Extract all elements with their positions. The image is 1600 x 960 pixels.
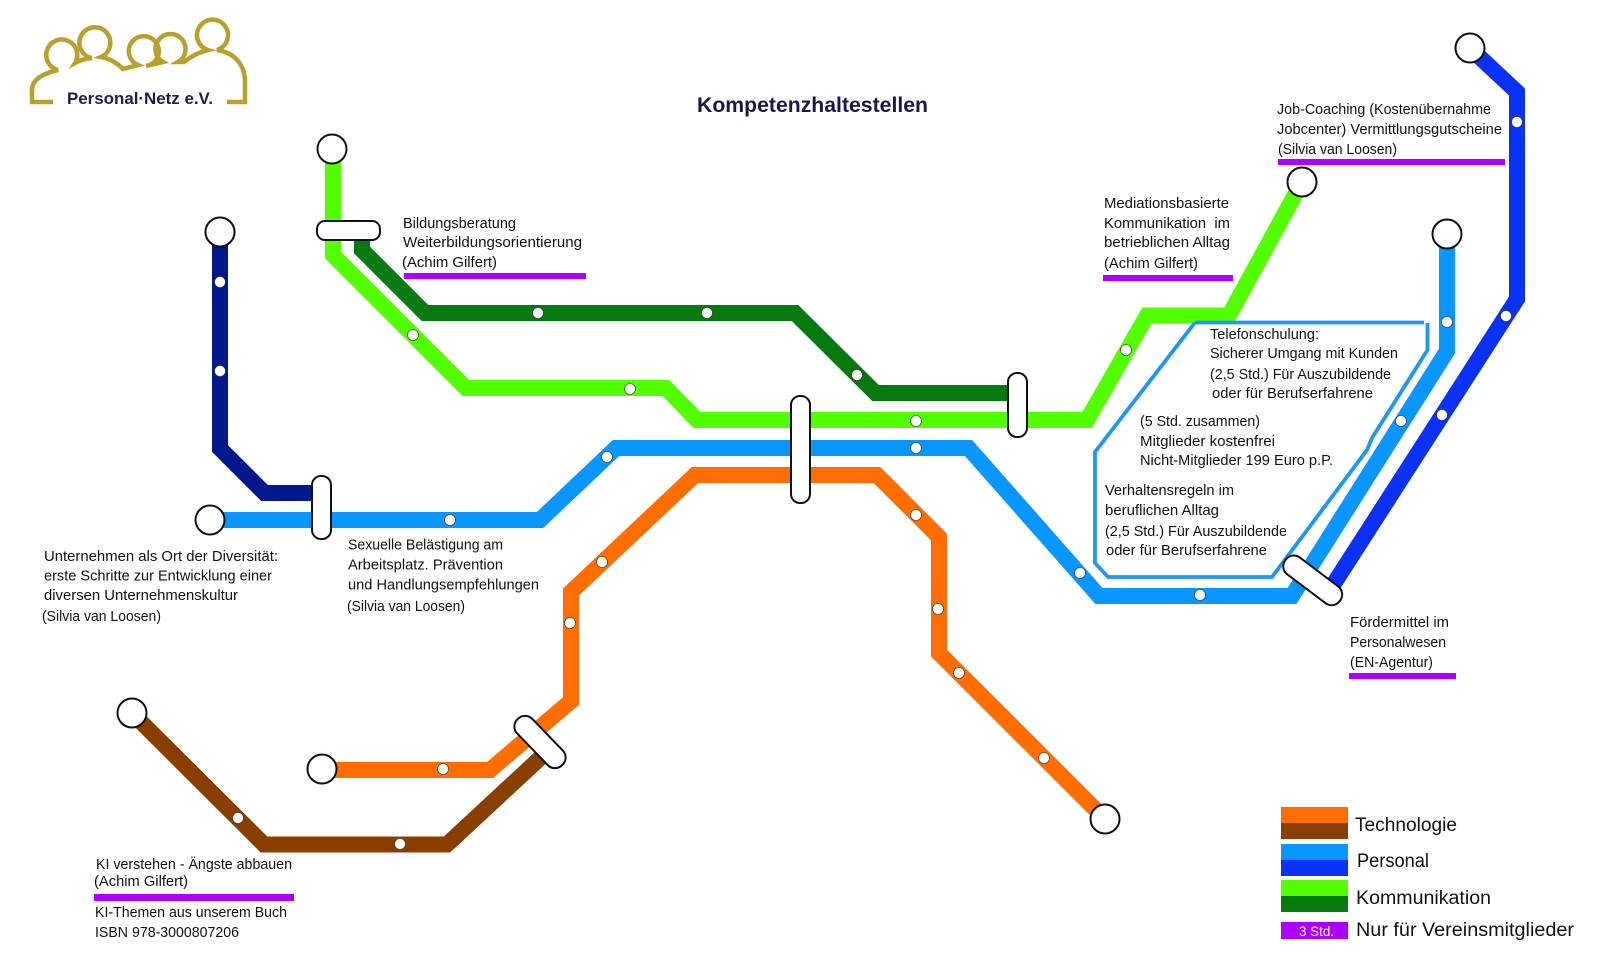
- label: KI verstehen: KI verstehen - Ängste abbauen: [96, 856, 292, 873]
- label: Mediationsbasierte Kommunikation: betrieblichen Alltag: [1104, 234, 1230, 251]
- interchange: green lines: [317, 221, 380, 240]
- legend: Kommunikation label: Kommunikation: [1356, 888, 1491, 909]
- stop: [852, 370, 862, 380]
- stop: [532, 308, 544, 318]
- label: Unternehmen als Ort der Diversität: Unternehmen als Ort der Diversität:: [44, 548, 278, 565]
- member bar: [1103, 275, 1233, 281]
- label: Preise: (5 Std. zusammen): [1140, 413, 1260, 430]
- stop: [564, 618, 576, 628]
- legend: [1281, 807, 1575, 941]
- stop: [408, 330, 418, 340]
- line: lime (Kommunikation): [333, 149, 1302, 426]
- label: KI verstehen: [94, 856, 294, 941]
- interchange: light blue and blue: [1279, 552, 1346, 609]
- line: dark green (Kommunikation): [362, 235, 1018, 393]
- member bar: [1349, 673, 1456, 679]
- label: Job-Coaching: Jobcenter) Vermittlungsgutscheine: [1277, 121, 1502, 138]
- label: Telefonschulung: Telefonschulung:: [1210, 326, 1319, 343]
- line: brown (Technologie): [132, 713, 551, 850]
- stop: [232, 812, 244, 824]
- stop: [1038, 752, 1050, 764]
- legend: Personal label: Personal: [1357, 851, 1429, 872]
- member bar: [404, 273, 586, 279]
- line: light blue (Personal): [210, 234, 1452, 600]
- legend: member swatch: [1281, 922, 1348, 939]
- label: Unternehmen als Ort der Diversität: (Silvia van Loosen): [42, 608, 161, 625]
- label: KI verstehen: KI-Themen aus unserem Buch: [95, 904, 287, 921]
- logo outline: group of people: [32, 20, 245, 102]
- stop: [1442, 316, 1452, 328]
- label: Preise: Nicht-Mitglieder 199 Euro p.P.: [1140, 452, 1333, 469]
- terminal stations: [118, 34, 1484, 834]
- label: Unternehmen als Ort der Diversität: diversen Unternehmenskultur: [44, 587, 238, 604]
- legend: Kommunikation swatch: [1281, 880, 1348, 912]
- label: Preise: [1140, 413, 1333, 469]
- label: Preise: Mitglieder kostenfrei: [1140, 433, 1275, 450]
- label: Fördermittel: Fördermittel im: [1350, 614, 1449, 631]
- label: Sexuelle Belästigung: [347, 536, 539, 615]
- label: KI verstehen: (Achim Gilfert): [94, 873, 188, 890]
- terminal: lime end: [1288, 168, 1316, 196]
- interchange: orange and brown: [510, 712, 570, 772]
- label: Verhaltensregeln: beruflichen Alltag: [1105, 502, 1219, 519]
- terminal: lime start: [318, 134, 346, 164]
- label: Sexuelle Belästigung: Arbeitsplatz. Prävention: [348, 556, 503, 574]
- terminal: brown: [118, 698, 146, 728]
- label: Fördermittel: [1349, 614, 1456, 679]
- legend: member label: Nur für Vereinsmitglieder: [1356, 920, 1575, 941]
- label: Mediationsbasierte Kommunikation: Kommunikation im: [1104, 215, 1230, 232]
- stop: [702, 308, 712, 318]
- interchange: dark green and lime: [1008, 373, 1027, 437]
- stop: [596, 556, 608, 568]
- terminal: light blue end: [1432, 220, 1462, 248]
- line: navy (Personal): [214, 232, 322, 493]
- label: Verhaltensregeln: oder für Berufserfahrene: [1106, 542, 1267, 559]
- stop: [1500, 310, 1512, 322]
- line: blue (Personal): [1333, 48, 1522, 585]
- label: Verhaltensregeln: Verhaltensregeln im: [1105, 482, 1234, 499]
- stop: [438, 764, 448, 774]
- interchange: navy and light blue: [312, 476, 331, 539]
- interchanges: [312, 221, 1346, 772]
- label: Telefonschulung: oder für Berufserfahrene: [1212, 385, 1373, 402]
- label: Unternehmen als Ort der Diversität: [42, 548, 278, 625]
- label: Bildungsberatung: [402, 215, 586, 279]
- terminal: light blue start: [196, 506, 224, 534]
- terminal: navy: [206, 218, 234, 246]
- terminal: orange end: [1090, 804, 1120, 834]
- terminal: orange start: [308, 754, 336, 784]
- label: Telefonschulung: Sicherer Umgang mit Kunden: [1210, 345, 1398, 362]
- label: KI verstehen: ISBN 978-3000807206: [95, 924, 239, 941]
- label: Job-Coaching: [1277, 101, 1505, 165]
- stop: [1194, 590, 1206, 600]
- label: Sexuelle Belästigung: und Handlungsempfehlungen: [348, 576, 539, 594]
- label: Telefonschulung: [1210, 326, 1398, 402]
- title: Kompetenzhaltestellen: [697, 94, 928, 117]
- label: Fördermittel: Personalwesen: [1350, 634, 1446, 651]
- stop: [910, 510, 922, 520]
- stop: [954, 668, 964, 678]
- label: Job-Coaching: (Silvia van Loosen): [1278, 141, 1397, 158]
- legend: Technologie swatch: [1281, 807, 1348, 839]
- stop: [394, 838, 406, 850]
- label: Job-Coaching: Job-Coaching (Kostenübernahme: [1277, 101, 1491, 118]
- logo: Personal-Netz e.V.: [32, 20, 245, 108]
- label: Bildungsberatung: Weiterbildungsorientierung: [403, 234, 582, 251]
- stop: [1074, 568, 1086, 578]
- legend: Personal swatch: [1281, 844, 1348, 876]
- stop: [1120, 344, 1132, 356]
- legend: member swatch: 3 Std.: [1299, 923, 1334, 939]
- label: Sexuelle Belästigung: Sexuelle Belästigung am: [348, 536, 503, 554]
- label: Unternehmen als Ort der Diversität: erste Schritte zur Entwicklung einer: [44, 568, 272, 584]
- stop: [910, 442, 922, 454]
- stop: [602, 452, 612, 462]
- stop: [910, 416, 922, 426]
- stop: [932, 604, 944, 614]
- label: Mediationsbasierte Kommunikation: [1103, 195, 1233, 281]
- label: Sexuelle Belästigung: (Silvia van Loosen): [347, 598, 465, 615]
- logo wordmark: Personal·Netz e.V.: [67, 89, 213, 108]
- label: Telefonschulung: (2,5 Std.) Für Auszubildende: [1210, 366, 1391, 383]
- stop: [624, 384, 636, 394]
- terminal: blue: [1456, 34, 1484, 62]
- label: Fördermittel: (EN-Agentur): [1350, 654, 1433, 671]
- member bar: [1278, 159, 1505, 165]
- label: Mediationsbasierte Kommunikation: Mediationsbasierte: [1104, 195, 1229, 212]
- legend: Technologie label: Technologie: [1355, 815, 1457, 836]
- member bar: [94, 894, 294, 901]
- label: Bildungsberatung: Bildungsberatung: [403, 215, 516, 232]
- stop: [1396, 416, 1406, 426]
- label: Mediationsbasierte Kommunikation: (Achim Gilfert): [1104, 255, 1198, 272]
- label: Verhaltensregeln: [1105, 482, 1287, 559]
- stop: [444, 514, 456, 526]
- stop: [214, 276, 226, 288]
- stop: [214, 366, 226, 376]
- stop: [1512, 116, 1522, 128]
- label: Verhaltensregeln: (2,5 Std.) Für Auszubildende: [1105, 523, 1287, 540]
- line: orange (Technologie): [322, 475, 1105, 819]
- interchange: lime, light blue, orange: [791, 396, 810, 503]
- outline: Telefonschulung loop: [1095, 322, 1428, 577]
- stop: [1436, 410, 1448, 420]
- label: Bildungsberatung: (Achim Gilfert): [402, 254, 497, 271]
